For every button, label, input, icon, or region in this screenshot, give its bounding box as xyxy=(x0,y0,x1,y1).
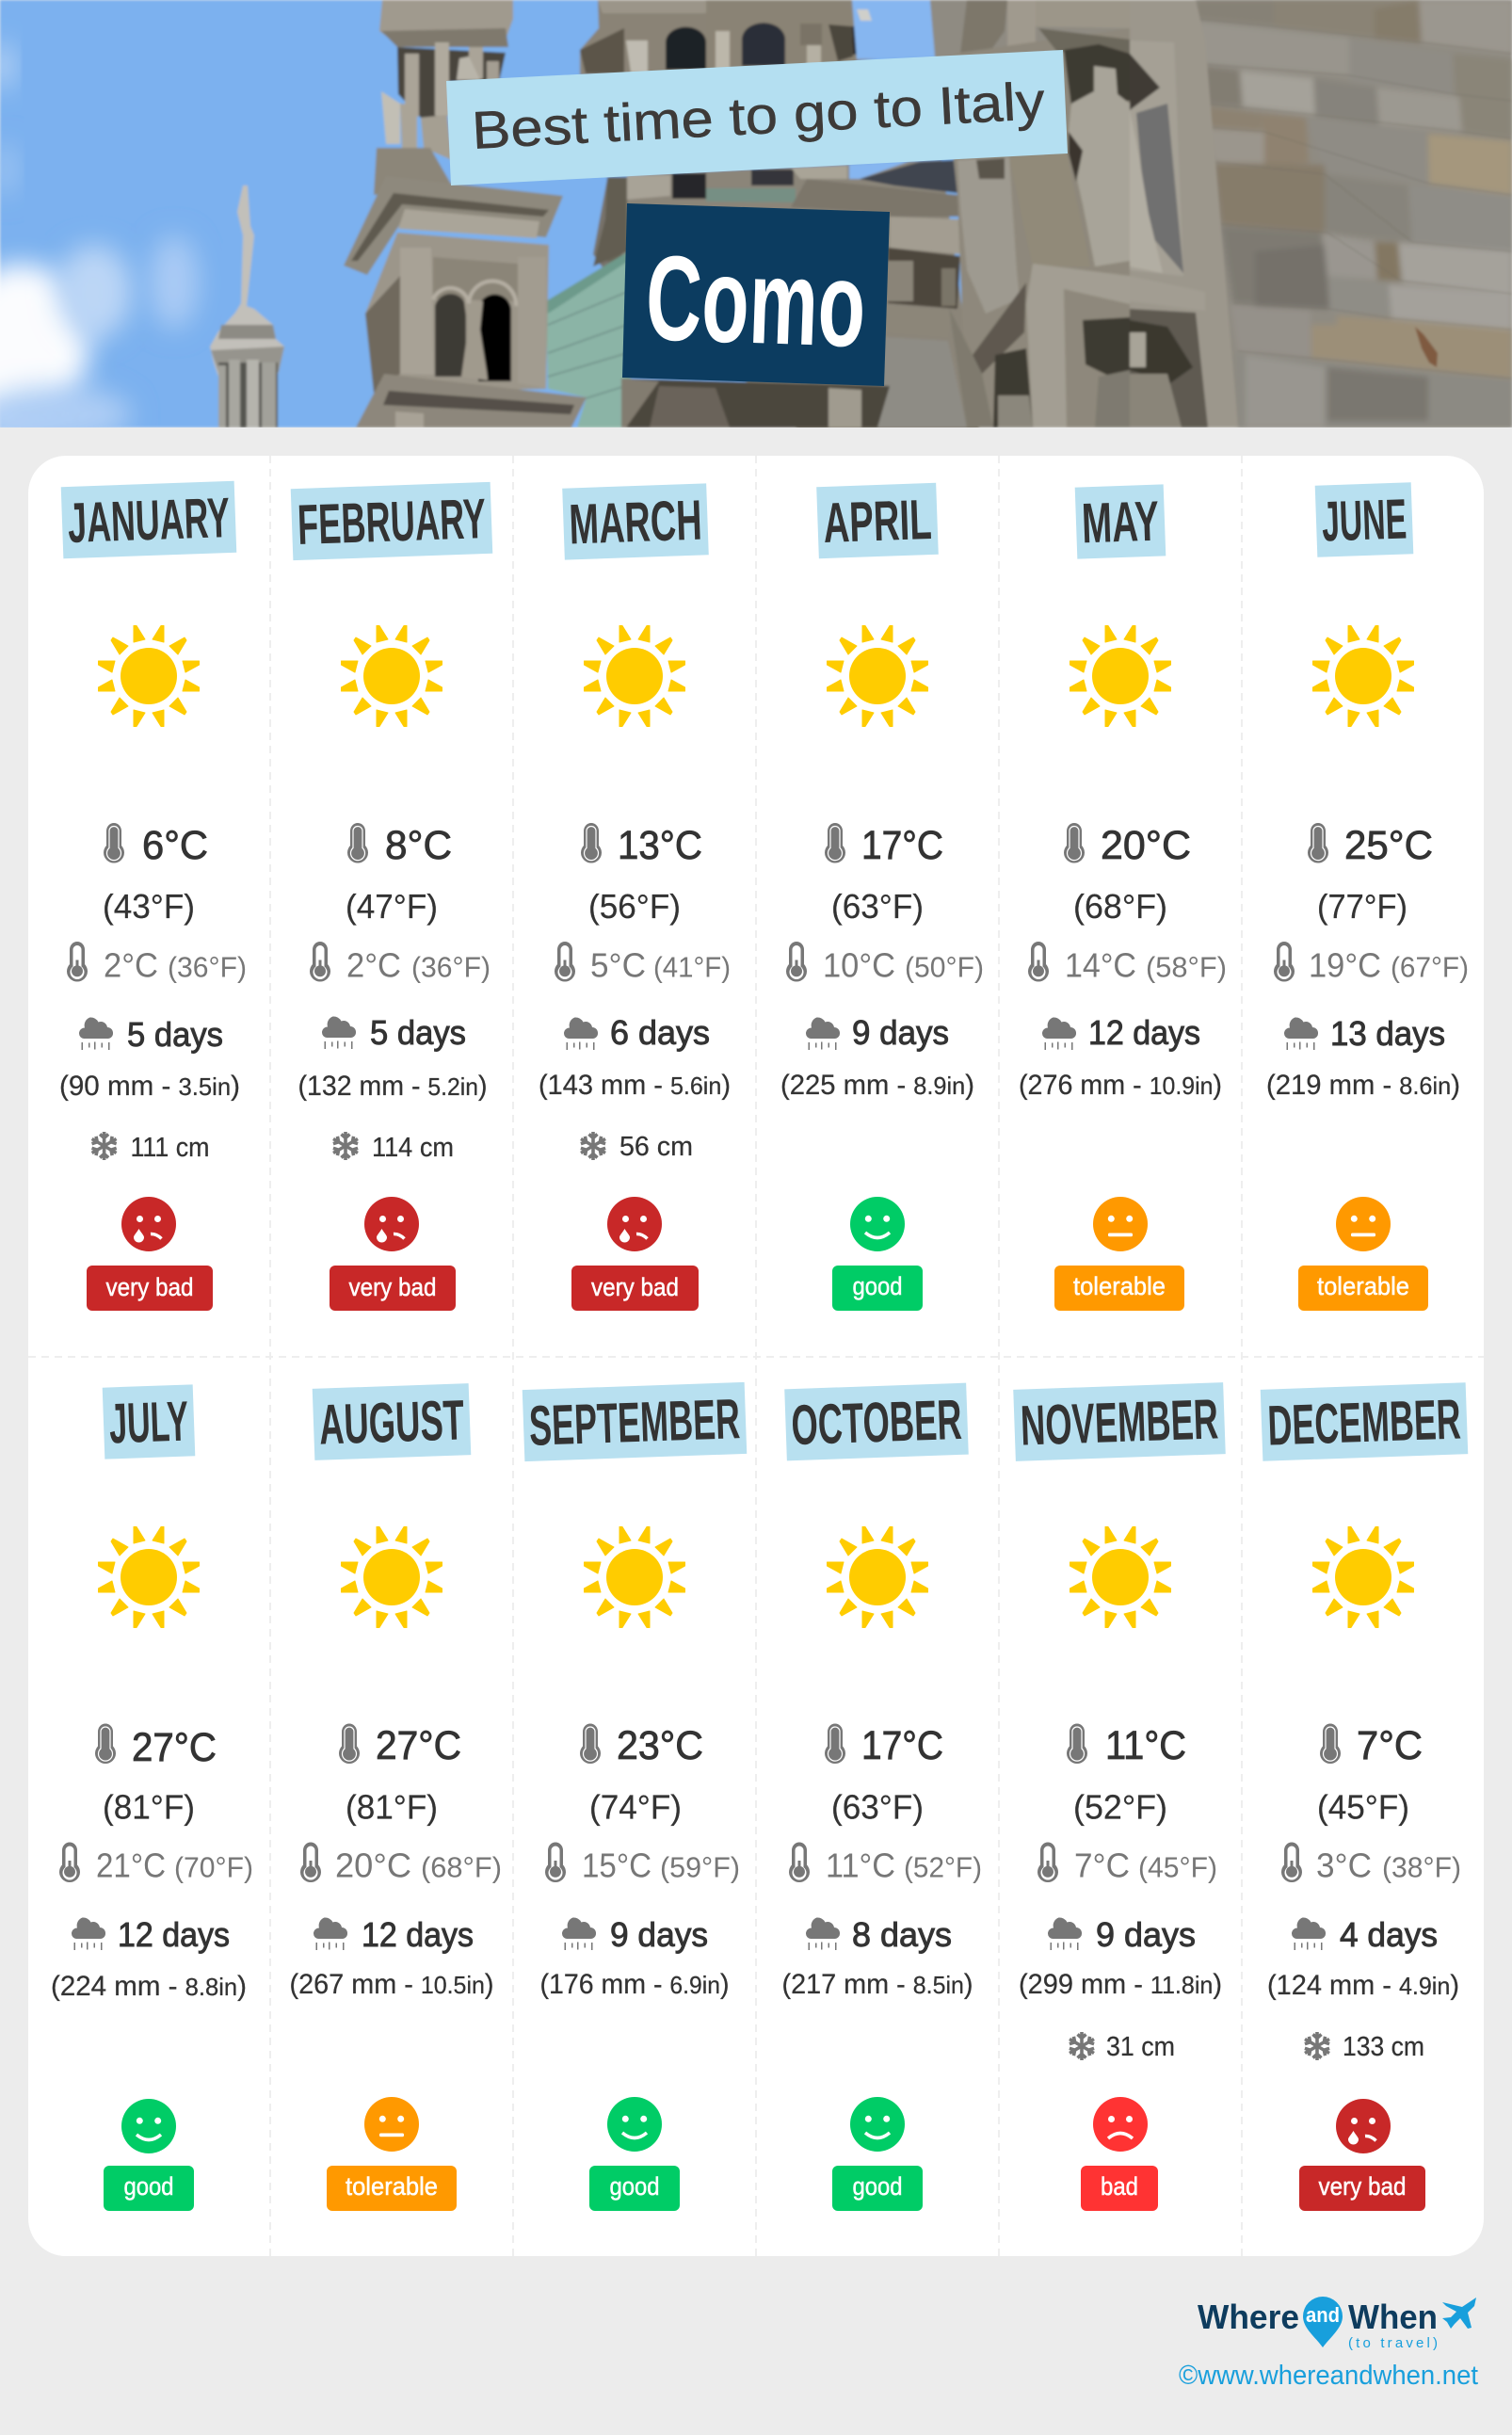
title text: Como xyxy=(644,231,868,373)
heading: October: OCTOBER xyxy=(790,1388,963,1457)
icon: thermometer low xyxy=(1037,1842,1058,1882)
rainy days: 8 days xyxy=(852,1915,952,1954)
rating badge xyxy=(571,1266,699,1311)
icon: rain xyxy=(806,1917,840,1950)
icon: tolerable face xyxy=(1093,1197,1148,1251)
icon: thermometer low xyxy=(1281,1842,1302,1882)
month: December xyxy=(1261,1382,1468,2211)
right end of left background: central tower top xyxy=(578,0,873,74)
month: April xyxy=(780,483,984,1311)
month: September xyxy=(523,1382,747,2211)
icon: very bad face xyxy=(607,1197,662,1251)
low temperature: 15°C xyxy=(582,1846,651,1885)
rainy days: 12 days xyxy=(1088,1013,1200,1052)
left tower: crown xyxy=(378,0,514,36)
panel: monthly climate xyxy=(28,456,1484,2256)
icon: thermometer low xyxy=(789,1842,810,1882)
rainy days: 12 days xyxy=(362,1915,474,1954)
snowfall: 31 cm xyxy=(1106,2032,1175,2062)
low temperature F: (58°F) xyxy=(1146,951,1227,983)
precipitation: (217 mm - 8.5in) xyxy=(781,1969,973,2000)
low temperature: 5°C xyxy=(590,945,646,985)
precipitation: (225 mm - 8.9in) xyxy=(780,1070,974,1101)
low temperature: 20°C xyxy=(335,1846,411,1885)
high temperature: 17°C xyxy=(861,823,943,868)
rating badge xyxy=(832,1266,923,1311)
mid building behind banners xyxy=(591,181,612,268)
high temperature F: (68°F) xyxy=(1073,887,1167,926)
icon: sun xyxy=(1312,625,1414,727)
icon: snow xyxy=(579,1132,607,1160)
left tower: cornice and body xyxy=(344,176,563,275)
high temperature: 27°C xyxy=(376,1723,461,1768)
low temperature: 19°C xyxy=(1309,945,1381,985)
rating badge: very bad xyxy=(591,1273,679,1301)
icon: sun xyxy=(1070,1527,1171,1627)
rating badge: good xyxy=(853,1272,902,1300)
sky gap at top of centre xyxy=(852,0,935,59)
icon: plane xyxy=(1442,2298,1476,2329)
rating badge: good xyxy=(610,2172,659,2201)
high temperature: 13°C xyxy=(618,823,702,868)
spire, statue and columns xyxy=(209,185,284,376)
icon: rain xyxy=(1048,1917,1082,1950)
heading: August xyxy=(313,1383,471,1460)
low temperature F: (59°F) xyxy=(660,1851,740,1883)
precipitation: (299 mm - 11.8in) xyxy=(1019,1969,1222,2000)
rating badge xyxy=(87,1266,213,1311)
icon: rain xyxy=(564,1017,598,1050)
rating badge xyxy=(330,1266,456,1311)
precipitation: (224 mm - 8.8in) xyxy=(51,1971,247,2002)
rating badge xyxy=(104,2166,194,2211)
website credit: ©www.whereandwhen.net xyxy=(1179,2361,1478,2391)
icon: tolerable face xyxy=(1336,1197,1391,1251)
photo: Como cathedral xyxy=(0,0,1512,427)
high temperature: 23°C xyxy=(617,1723,703,1768)
rainy days: 9 days xyxy=(852,1013,949,1052)
heading: January: JANUARY xyxy=(67,486,231,555)
low temperature: 11°C xyxy=(826,1846,895,1885)
low temperature: 10°C xyxy=(823,945,895,985)
icon: snow xyxy=(331,1132,360,1160)
icon: sun xyxy=(584,625,685,727)
rating badge xyxy=(589,2166,680,2211)
heading: March: MARCH xyxy=(568,489,703,556)
rating badge xyxy=(1054,1266,1184,1311)
high temperature F: (47°F) xyxy=(346,887,438,926)
heading: September xyxy=(523,1382,747,1461)
low temperature F: (36°F) xyxy=(411,951,491,983)
heading: July xyxy=(103,1384,195,1459)
rating badge xyxy=(1299,2166,1425,2211)
icon: sun xyxy=(827,1527,928,1627)
high temperature F: (81°F) xyxy=(103,1787,195,1827)
left tower: base xyxy=(356,374,587,427)
heading: September: SEPTEMBER xyxy=(528,1387,741,1458)
month: March xyxy=(539,483,731,1311)
icon: rain xyxy=(806,1017,840,1050)
rating badge: very bad xyxy=(105,1273,194,1301)
subtitle text: Best time to go to Italy xyxy=(471,71,1046,160)
dome xyxy=(545,262,632,427)
high temperature F: (63°F) xyxy=(831,887,924,926)
icon: thermometer high xyxy=(339,1723,360,1764)
icon: thermometer high xyxy=(1320,1723,1341,1764)
icon: map pin: and xyxy=(1306,2303,1340,2327)
icon: thermometer low xyxy=(545,1842,566,1882)
rating badge: good xyxy=(124,2172,173,2201)
icon: snow xyxy=(89,1132,119,1160)
icon: bad face xyxy=(1093,2097,1148,2152)
icon: tolerable face xyxy=(364,2097,419,2152)
precipitation: (267 mm - 10.5in) xyxy=(290,1969,493,2000)
rating badge xyxy=(832,2166,923,2211)
icon: rain xyxy=(562,1917,596,1950)
icon: sun xyxy=(98,1527,200,1627)
month: July xyxy=(51,1384,253,2211)
rainy days: 5 days xyxy=(127,1015,223,1054)
icon: map pin xyxy=(1303,2297,1343,2347)
rating badge: very bad xyxy=(348,1273,437,1301)
icon: rain xyxy=(322,1016,356,1049)
icon: thermometer low xyxy=(1028,942,1049,982)
rating badge: very bad xyxy=(1318,2172,1407,2201)
high temperature F: (45°F) xyxy=(1317,1787,1409,1827)
banner: Como xyxy=(622,203,890,386)
high temperature F: (56°F) xyxy=(588,887,681,926)
precipitation: (276 mm - 10.9in) xyxy=(1019,1070,1222,1101)
high temperature F: (43°F) xyxy=(103,887,195,926)
icon: thermometer high xyxy=(1067,1723,1087,1764)
heading: November xyxy=(1013,1382,1226,1461)
low temperature: 14°C xyxy=(1065,945,1136,985)
rating badge: tolerable xyxy=(1073,1272,1166,1300)
icon: sun xyxy=(1312,1527,1414,1627)
icon: thermometer high xyxy=(95,1723,116,1764)
rainy days: 12 days xyxy=(118,1915,230,1954)
rating badge xyxy=(1298,1266,1428,1311)
cathedral wall: plain stone blocks xyxy=(1196,0,1512,427)
snowfall: 111 cm xyxy=(130,1133,209,1163)
rating badge: bad xyxy=(1101,2172,1138,2201)
month: October xyxy=(781,1383,982,2211)
rainy days: 9 days xyxy=(1096,1915,1196,1954)
high temperature: 17°C xyxy=(861,1723,943,1768)
high temperature F: (74°F) xyxy=(589,1787,682,1827)
heading: May: MAY xyxy=(1081,490,1160,555)
icon: very bad face xyxy=(1336,2099,1391,2153)
heading: February: FEBRUARY xyxy=(297,487,487,556)
icon: thermometer low xyxy=(1274,942,1295,982)
icon: thermometer high xyxy=(581,823,602,863)
month: January xyxy=(59,481,247,1311)
heading: October xyxy=(784,1383,969,1460)
icon: thermometer low xyxy=(555,942,575,982)
icon: sun xyxy=(584,1527,685,1627)
rating badge xyxy=(1081,2166,1158,2211)
cathedral wall base xyxy=(930,0,1512,427)
icon: rain xyxy=(1042,1017,1076,1050)
high temperature: 25°C xyxy=(1344,823,1433,868)
low temperature F: (52°F) xyxy=(904,1851,982,1883)
low temperature F: (70°F) xyxy=(174,1851,253,1883)
icon: thermometer low xyxy=(786,942,807,982)
low temperature F: (67°F) xyxy=(1391,951,1469,983)
icon: thermometer high xyxy=(825,1723,845,1764)
icon: thermometer low xyxy=(59,1842,80,1882)
heading: June: JUNE xyxy=(1321,487,1407,554)
month: November xyxy=(1013,1382,1226,2211)
cathedral wall: right statues xyxy=(1130,0,1238,427)
rating badge: good xyxy=(853,2172,902,2201)
rainy days: 5 days xyxy=(370,1013,466,1052)
icon: very bad face xyxy=(121,1197,176,1251)
under Como title xyxy=(621,379,890,427)
low temperature: 21°C xyxy=(96,1846,166,1885)
heading: March xyxy=(562,483,709,560)
low temperature F: (41°F) xyxy=(653,951,731,983)
heading: April xyxy=(816,483,939,558)
rating badge: tolerable xyxy=(346,2172,438,2201)
snowfall: 56 cm xyxy=(619,1132,693,1162)
icon: snow xyxy=(1303,2032,1331,2060)
high temperature F: (77°F) xyxy=(1317,887,1407,926)
logo: Where and When: Where xyxy=(1198,2298,1299,2336)
icon: rain xyxy=(1284,1017,1318,1050)
icon: thermometer high xyxy=(347,823,368,863)
icon: rain xyxy=(314,1917,347,1950)
low temperature: 3°C xyxy=(1316,1846,1372,1885)
icon: sun xyxy=(1070,625,1171,727)
high temperature F: (52°F) xyxy=(1073,1787,1167,1827)
heading: June xyxy=(1315,482,1413,557)
precipitation: (219 mm - 8.6in) xyxy=(1266,1070,1460,1101)
heading: July: JULY xyxy=(108,1390,189,1455)
icon: good face xyxy=(121,2099,176,2153)
icon: thermometer low xyxy=(300,1842,321,1882)
icon: thermometer high xyxy=(104,823,124,863)
low temperature: 2°C xyxy=(346,945,401,985)
high temperature: 8°C xyxy=(385,823,452,868)
heading: April: APRIL xyxy=(822,488,933,555)
month: February xyxy=(291,482,492,1311)
precipitation: (124 mm - 4.9in) xyxy=(1267,1970,1459,2001)
high temperature F: (63°F) xyxy=(831,1787,924,1827)
icon: thermometer low xyxy=(310,942,330,982)
cathedral wall: left statues xyxy=(960,0,1007,54)
heading: January xyxy=(61,481,236,558)
icon: good face xyxy=(607,2097,662,2152)
snowfall: 133 cm xyxy=(1343,2032,1424,2062)
month: August xyxy=(290,1383,502,2211)
logo: Where and When: (to travel) xyxy=(1348,2335,1438,2351)
icon: thermometer high xyxy=(1064,823,1085,863)
icon: sun xyxy=(827,625,928,727)
icon: rain xyxy=(72,1917,105,1950)
icon: thermometer high xyxy=(580,1723,601,1764)
icon: good face xyxy=(850,2097,905,2152)
month: June xyxy=(1266,482,1469,1311)
banner: Best time to go to Italy xyxy=(446,50,1068,185)
low temperature F: (38°F) xyxy=(1382,1851,1461,1883)
icon: sun xyxy=(341,625,442,727)
icon: thermometer high xyxy=(825,823,845,863)
rating badge: tolerable xyxy=(1317,1272,1409,1300)
icon: very bad face xyxy=(364,1197,419,1251)
icon: rain xyxy=(1292,1917,1326,1950)
high temperature: 6°C xyxy=(142,823,208,868)
rating badge xyxy=(327,2166,457,2211)
heading: February xyxy=(291,482,492,560)
icon: good face xyxy=(850,1197,905,1251)
rainy days: 6 days xyxy=(610,1013,710,1052)
high temperature: 27°C xyxy=(132,1725,217,1770)
high temperature: 7°C xyxy=(1357,1723,1423,1768)
rainy days: 9 days xyxy=(610,1915,708,1954)
low temperature F: (50°F) xyxy=(905,951,984,983)
icon: thermometer low xyxy=(67,942,88,982)
low temperature: 7°C xyxy=(1074,1846,1130,1885)
high temperature F: (81°F) xyxy=(346,1787,438,1827)
logo: Where and When: When xyxy=(1348,2298,1438,2336)
rainy days: 4 days xyxy=(1340,1915,1438,1954)
low temperature F: (45°F) xyxy=(1138,1851,1217,1883)
heading: November: NOVEMBER xyxy=(1020,1387,1219,1458)
precipitation: (176 mm - 6.9in) xyxy=(540,1969,729,2000)
precipitation: (132 mm - 5.2in) xyxy=(298,1071,488,1102)
rainy days: 13 days xyxy=(1330,1014,1445,1053)
high temperature: 11°C xyxy=(1105,1723,1186,1768)
heading: May xyxy=(1075,484,1166,559)
low temperature F: (68°F) xyxy=(421,1851,502,1883)
low temperature F: (36°F) xyxy=(168,951,247,983)
high temperature: 20°C xyxy=(1101,823,1191,868)
icon: thermometer high xyxy=(1308,823,1328,863)
month: May xyxy=(1019,484,1227,1311)
icon: sun xyxy=(98,625,200,727)
icon: sun xyxy=(341,1527,442,1627)
icon: rain xyxy=(79,1017,113,1050)
heading: August: AUGUST xyxy=(318,1388,465,1457)
snowfall: 114 cm xyxy=(372,1133,454,1163)
logo: Where and When xyxy=(1198,2297,1476,2351)
precipitation: (143 mm - 5.6in) xyxy=(539,1070,731,1101)
precipitation: (90 mm - 3.5in) xyxy=(59,1071,240,1102)
icon: snow xyxy=(1068,2032,1096,2060)
low temperature: 2°C xyxy=(104,945,158,985)
